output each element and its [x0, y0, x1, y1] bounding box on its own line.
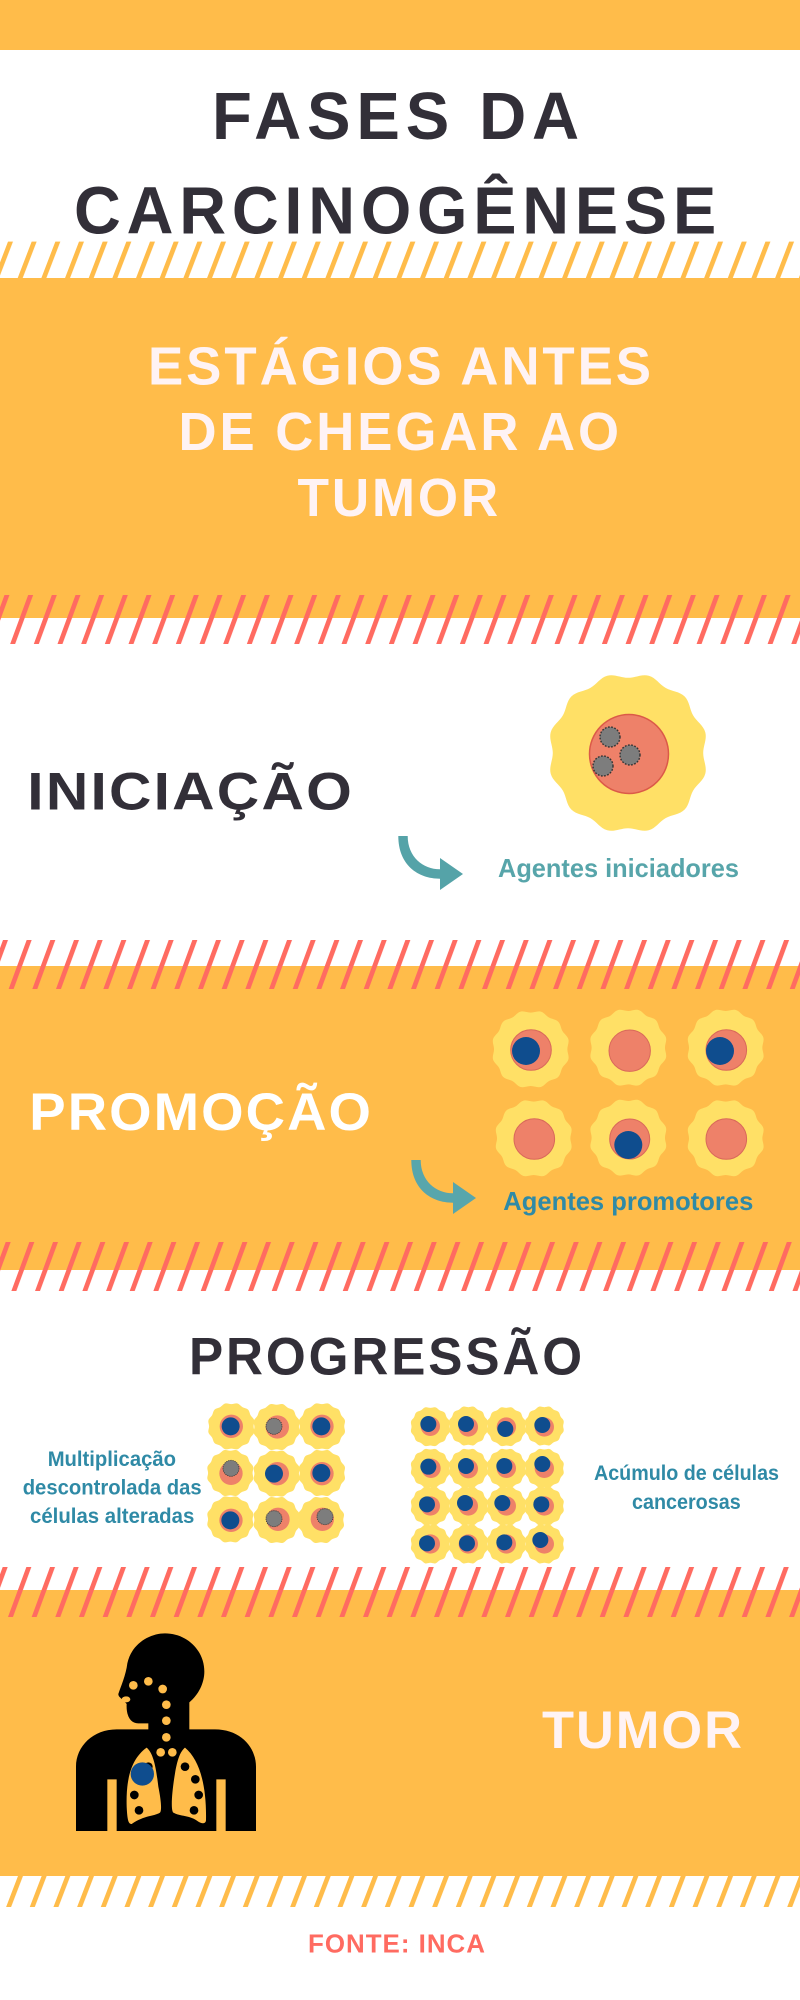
- title: CARCINOGÊNESE: [74, 174, 722, 248]
- subtitle: [148, 336, 654, 528]
- panel: tumor: [0, 1590, 800, 1876]
- section: iniciação: [27, 675, 739, 890]
- arrow: [411, 1160, 476, 1214]
- subtitle: TUMOR: [298, 468, 501, 528]
- heading: promoção: PROMOÇÃO: [29, 1082, 373, 1142]
- label: multiplicação descontrolada: células alteradas: [30, 1505, 194, 1528]
- label: acúmulo de células cancerosas: [594, 1462, 779, 1514]
- heading: iniciação: INICIAÇÃO: [27, 761, 354, 821]
- panel: promoção: [0, 966, 800, 1270]
- label: agentes iniciadores: Agentes iniciadores: [498, 853, 739, 883]
- panel: estágios antes de chegar ao tumor: [0, 278, 800, 618]
- top band: [0, 0, 800, 50]
- cell grid: altered cells: [207, 1403, 345, 1543]
- icon: cell with altered nuclei: [550, 675, 706, 831]
- label: multiplicação descontrolada: Multiplicação: [48, 1448, 176, 1471]
- title: [74, 79, 722, 248]
- label: acúmulo de células cancerosas: cancerosas: [632, 1491, 741, 1514]
- subtitle: DE CHEGAR AO: [178, 402, 622, 462]
- arrow: [398, 836, 463, 890]
- title: FASES DA: [212, 79, 585, 154]
- icon: human torso with lungs: [76, 1633, 256, 1831]
- heading: tumor: TUMOR: [542, 1701, 744, 1760]
- cell grid: cancer cells: [411, 1407, 564, 1563]
- heading: progressão: PROGRESSÃO: [189, 1326, 585, 1386]
- cell grid: promotion: [493, 1010, 764, 1176]
- label: multiplicação descontrolada: [23, 1448, 202, 1528]
- label: multiplicação descontrolada: descontrolada das: [23, 1476, 202, 1499]
- subtitle: ESTÁGIOS ANTES: [148, 336, 654, 396]
- source: FONTE: INCA: [308, 1928, 486, 1958]
- label: agentes promotores: Agentes promotores: [503, 1186, 753, 1216]
- label: acúmulo de células cancerosas: Acúmulo de células: [594, 1462, 779, 1485]
- section: progressão: [23, 1326, 779, 1563]
